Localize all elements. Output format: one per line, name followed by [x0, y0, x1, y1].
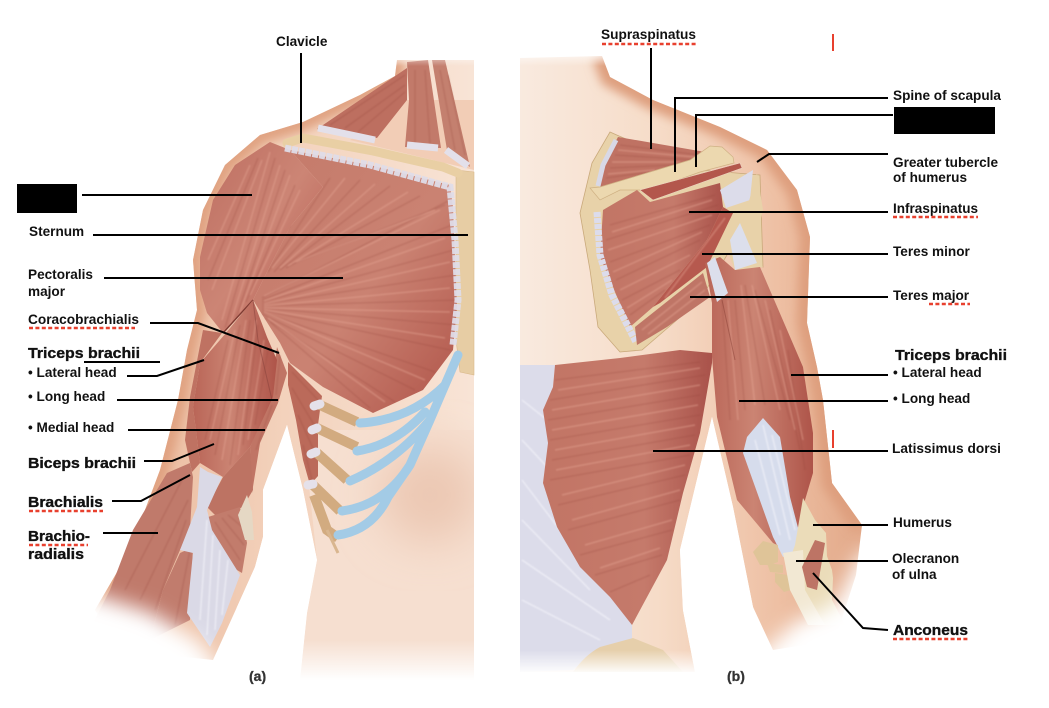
skin: back and arm	[515, 48, 862, 672]
neck muscles	[317, 60, 470, 167]
elbow bones	[753, 498, 845, 625]
latissimus dorsi	[543, 350, 712, 625]
cut deltoid origin	[640, 163, 742, 200]
serratus anterior	[288, 362, 322, 485]
label: Coracobrachialis: Coracobrachialis	[28, 312, 139, 327]
label: Long head posterior: • Long head	[893, 391, 970, 406]
triceps long and medial heads	[250, 347, 287, 493]
spine of scapula	[590, 146, 734, 200]
ribs and costal cartilage	[308, 355, 458, 553]
label: Pectoralis major: Pectoralis	[28, 267, 93, 282]
humerus head	[727, 173, 763, 270]
latissimus dorsi aponeurosis	[520, 365, 632, 672]
medial scapular tendon	[597, 212, 636, 342]
label: Brachioradialis: Brachio-	[28, 529, 90, 545]
triceps lateral and long heads	[705, 257, 813, 550]
label: Teres major: Teres major	[893, 288, 970, 303]
teres minor	[653, 207, 733, 307]
label: Medial head: • Medial head	[28, 420, 114, 435]
skin: chest and arm	[95, 60, 480, 680]
panel (a): anterior view illustration	[96, 60, 474, 673]
label: Latissimus dorsi: Latissimus dorsi	[892, 441, 1001, 456]
red mark: top	[832, 34, 834, 51]
scapula bone	[580, 132, 763, 352]
label: Supraspinatus: Supraspinatus	[601, 27, 696, 42]
redaction box: right	[894, 107, 995, 134]
bottom fade	[515, 650, 700, 674]
label: Lateral head anterior: • Lateral head	[28, 365, 117, 380]
label: Brachioradialis: radialis	[28, 547, 84, 563]
medial epicondyle	[238, 495, 254, 540]
label: Triceps brachii posterior: Triceps brachii	[895, 348, 1007, 364]
forearm fade	[750, 550, 905, 690]
label: Olecranon of ulna: of ulna	[892, 567, 937, 582]
label: Humerus: Humerus	[893, 515, 952, 530]
label: Lateral head posterior: • Lateral head	[893, 365, 982, 380]
sternal and clavicular tendon fringe	[285, 148, 458, 345]
upper arm tendons	[707, 223, 757, 302]
label: Olecranon of ulna: Olecranon	[892, 551, 959, 566]
bicipital aponeurosis	[180, 467, 240, 647]
label: Clavicle: Clavicle	[276, 34, 328, 49]
brachioradialis	[92, 463, 193, 640]
label: Teres minor: Teres minor	[893, 244, 971, 259]
infraspinatus	[600, 183, 723, 327]
panel tag (b): (b)	[727, 668, 745, 684]
label: Brachialis: Brachialis	[28, 495, 103, 511]
label: Sternum: Sternum	[29, 224, 84, 239]
label: Greater tubercle of humerus: of humerus	[893, 170, 967, 185]
infraspinatus tendon	[720, 170, 753, 208]
forearm flexors	[208, 507, 247, 573]
label: Triceps brachii anterior: Triceps brachii	[28, 346, 140, 362]
supraspinatus	[598, 137, 705, 187]
label: Spine of scapula: Spine of scapula	[893, 88, 1001, 103]
redaction box: left	[17, 184, 77, 213]
teres major	[635, 273, 710, 345]
bottom fades	[30, 48, 480, 705]
triceps lateral head	[185, 330, 222, 472]
label: Biceps brachii: Biceps brachii	[28, 456, 136, 472]
pectoralis major	[253, 150, 457, 413]
label: Greater tubercle of humerus: Greater tubercle	[893, 155, 998, 170]
iliac crest	[573, 638, 683, 672]
red mark: lower	[832, 430, 834, 448]
brachialis lower arm	[207, 447, 253, 517]
triceps tendon	[743, 418, 803, 557]
panel (b): posterior view illustration	[520, 56, 862, 672]
anconeus	[802, 540, 825, 590]
label: Long head anterior: • Long head	[28, 389, 105, 404]
label: Brachioradialis	[28, 529, 90, 563]
biceps brachii	[193, 300, 277, 477]
panel tag (a): (a)	[249, 668, 266, 684]
deltoid	[200, 142, 323, 333]
sternum	[456, 170, 474, 375]
label: Pectoralis major: major	[28, 284, 66, 299]
label: Anconeus: Anconeus	[893, 623, 968, 639]
leader lines: anterior view	[82, 53, 468, 533]
leader lines: posterior view	[651, 48, 893, 630]
label: Infraspinatus: Infraspinatus	[893, 201, 978, 216]
clavicle bone	[287, 138, 458, 173]
